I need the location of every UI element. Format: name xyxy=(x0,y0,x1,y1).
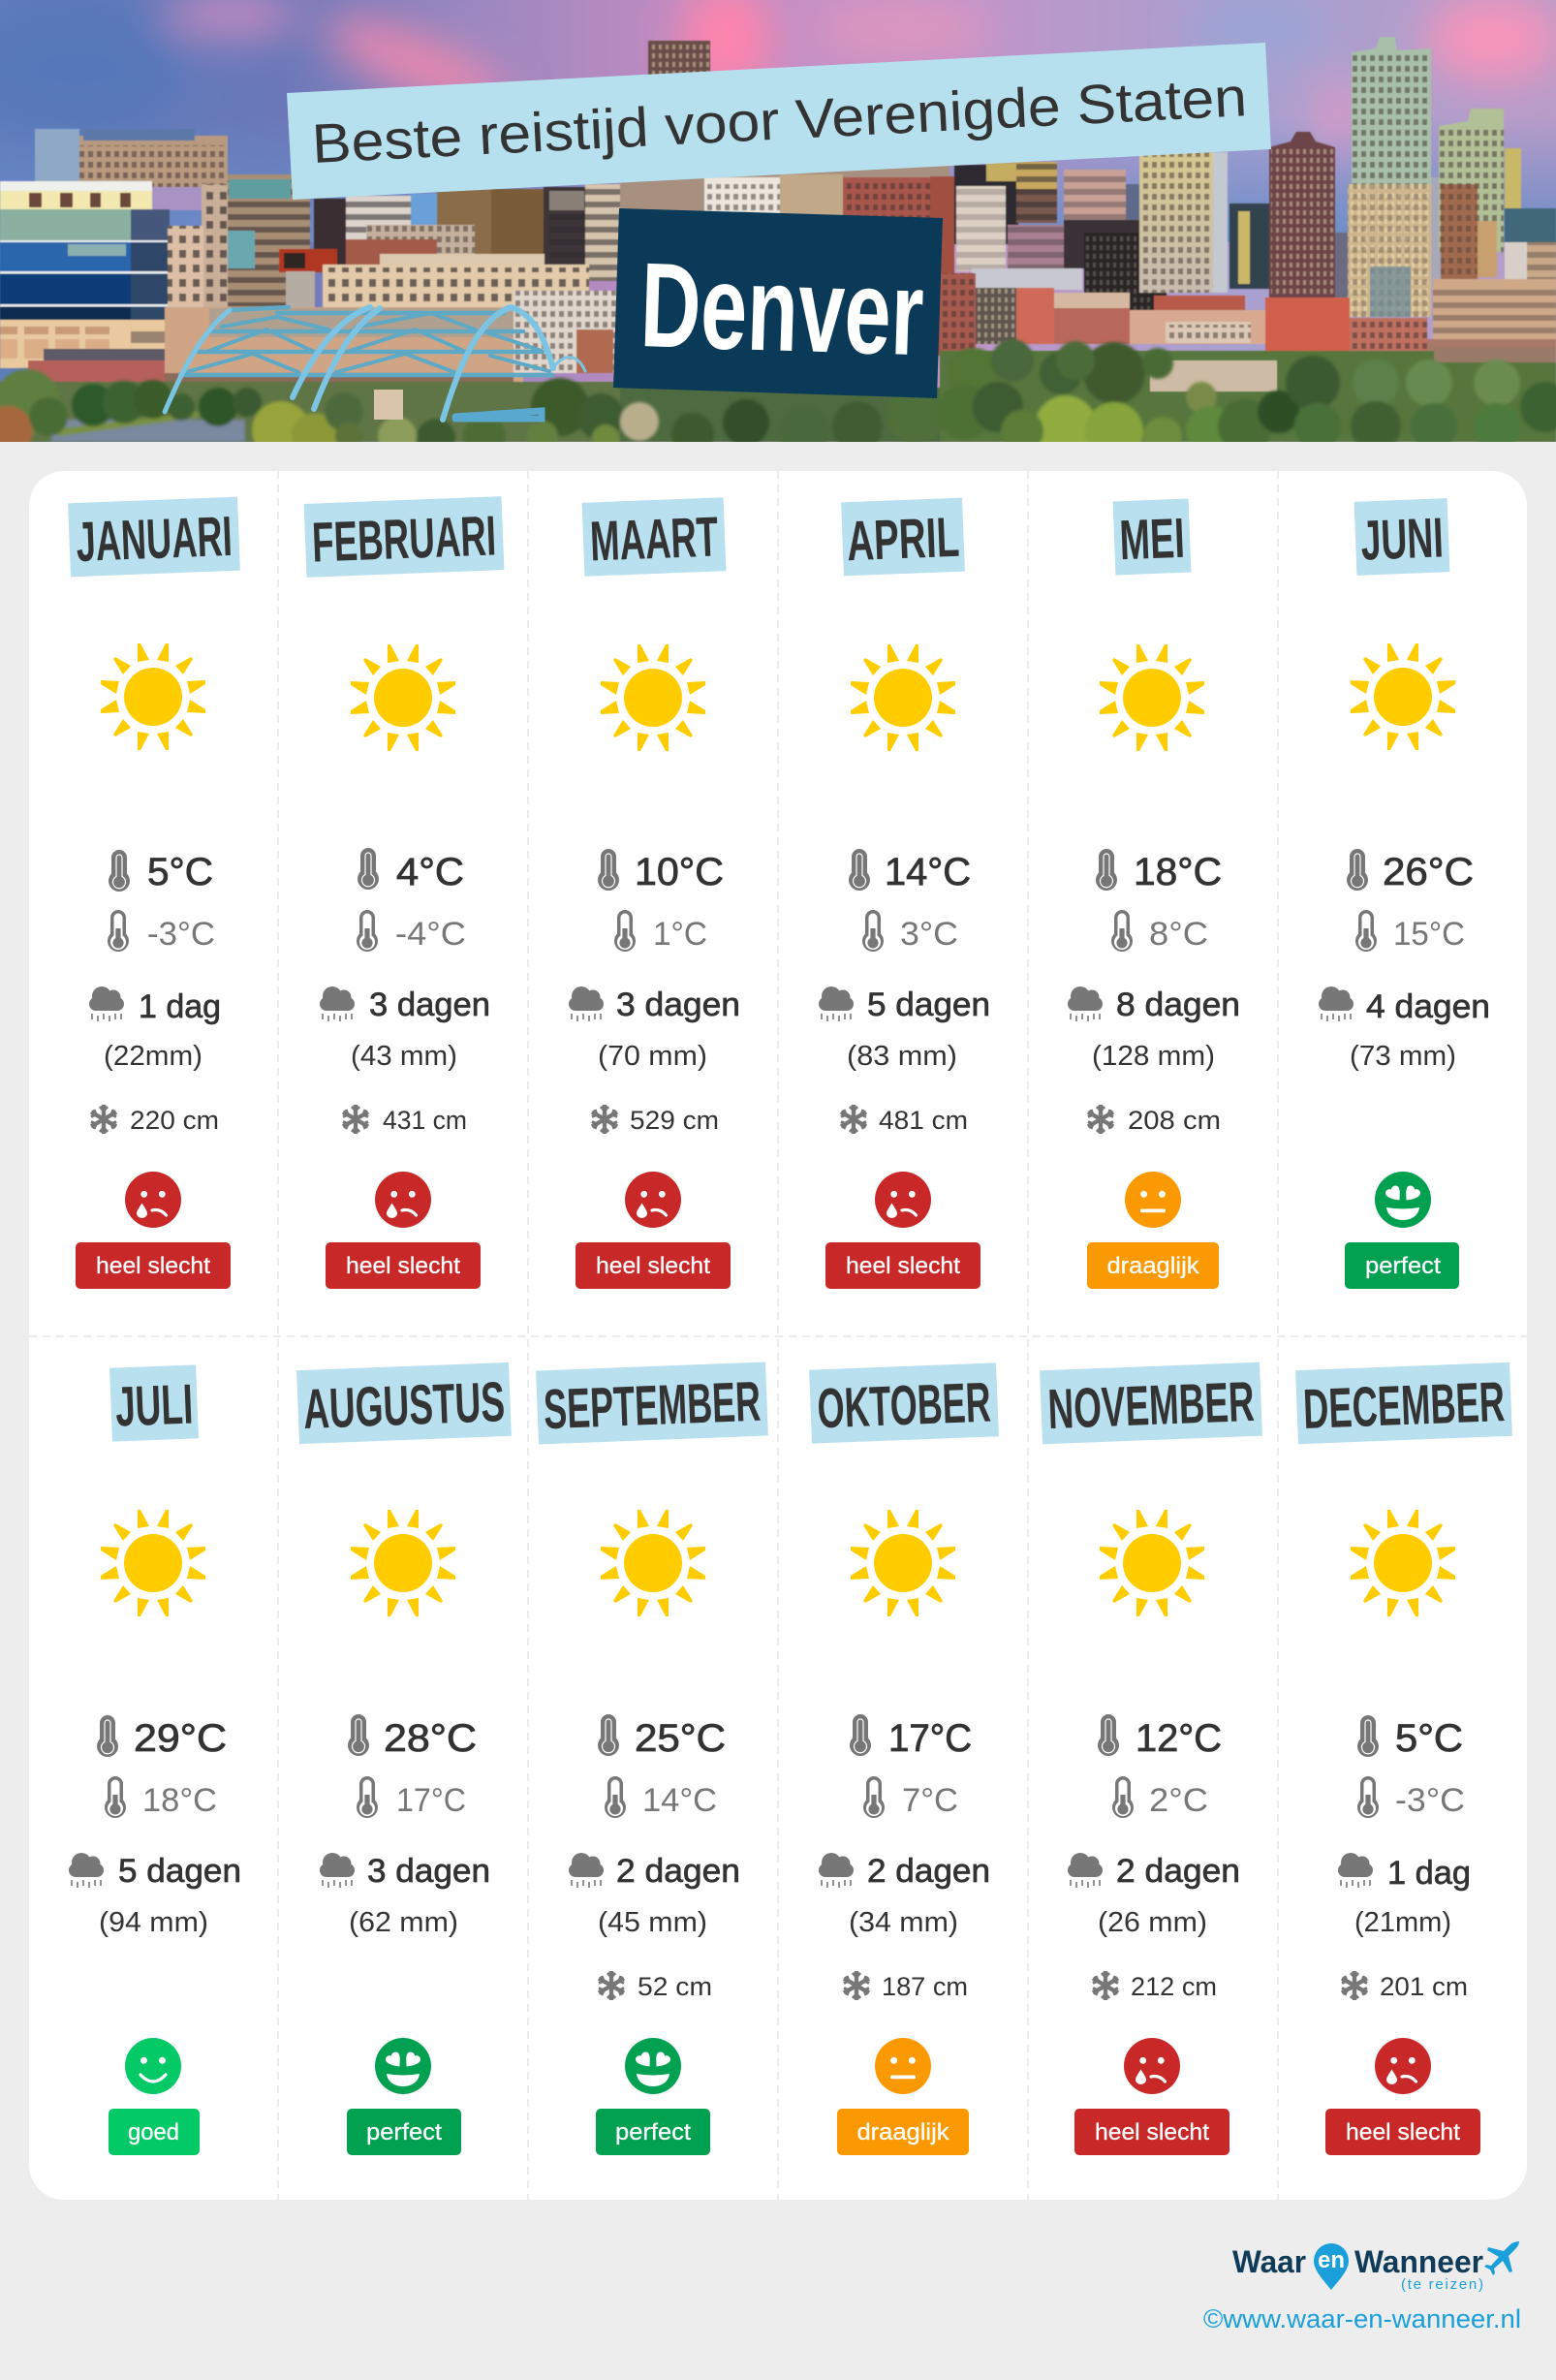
column: juli xyxy=(69,1364,241,2155)
city name box xyxy=(613,208,943,398)
logo text: Waar: Waar xyxy=(1232,2244,1306,2279)
panel: months table xyxy=(29,471,1527,2200)
rain days xyxy=(320,1853,490,1890)
month label: SEPTEMBER xyxy=(543,1370,762,1441)
snowfall xyxy=(592,1105,719,1135)
high temperature xyxy=(1098,1714,1222,1760)
rain days: 2 dagen xyxy=(1116,1853,1240,1890)
rating badge: perfect xyxy=(615,2119,691,2145)
month label xyxy=(1113,499,1191,575)
rating badge: heel slecht xyxy=(96,1253,210,1279)
high temperature xyxy=(849,849,971,893)
icon: sun xyxy=(101,643,205,750)
low temperature: -3°C xyxy=(1395,1782,1465,1819)
snowfall: 481 cm xyxy=(879,1106,968,1135)
rating badge xyxy=(825,1242,980,1289)
high temperature: 17°C xyxy=(888,1717,972,1760)
logo text: en: en xyxy=(1318,2247,1345,2273)
rain days xyxy=(569,986,740,1023)
low temperature xyxy=(108,910,215,953)
month label: JUNI xyxy=(1359,506,1445,573)
low temperature: 7°C xyxy=(902,1782,958,1819)
rating badge: heel slecht xyxy=(1095,2119,1209,2145)
backdrop behind bridge xyxy=(164,306,523,383)
high temperature: 5°C xyxy=(1395,1717,1463,1760)
rating badge xyxy=(1074,2109,1229,2155)
rating badge: perfect xyxy=(1365,1253,1441,1279)
tower above title banner xyxy=(647,40,711,75)
rating badge xyxy=(1345,1242,1459,1289)
rain days xyxy=(569,1853,740,1890)
icon: neutral face xyxy=(1125,1172,1181,1228)
rain days: 2 dagen xyxy=(616,1853,740,1890)
icon: sun xyxy=(351,644,455,751)
park base xyxy=(620,388,940,442)
snowfall xyxy=(844,1971,968,2001)
rainfall: (26 mm) xyxy=(1098,1907,1207,1938)
month label xyxy=(68,497,240,577)
low temperature: 3°C xyxy=(900,916,958,953)
low temperature xyxy=(614,910,707,953)
rain days: 1 dag xyxy=(1387,1855,1471,1892)
rating badge xyxy=(326,1242,481,1289)
column: mei xyxy=(1068,499,1240,1289)
low temperature xyxy=(862,910,958,953)
rating badge: perfect xyxy=(366,2119,442,2145)
month label xyxy=(109,1364,199,1442)
snowfall xyxy=(599,1971,712,2001)
icon: sad face xyxy=(125,1172,181,1228)
column: februari xyxy=(304,496,504,1289)
icon: sun xyxy=(601,1510,705,1616)
rating badge: heel slecht xyxy=(596,1253,710,1279)
rain days xyxy=(1338,1853,1471,1892)
snowfall: 187 cm xyxy=(882,1972,968,2001)
high temperature xyxy=(598,1714,726,1760)
rating badge xyxy=(109,2109,200,2155)
rain days: 2 dagen xyxy=(867,1853,990,1890)
icon: sad face xyxy=(625,1172,681,1228)
icon: heart-eyes face xyxy=(375,2038,431,2094)
month label: JULI xyxy=(114,1372,194,1439)
high temperature: 5°C xyxy=(147,851,213,893)
rain days: 4 dagen xyxy=(1366,988,1490,1025)
rain days: 8 dagen xyxy=(1116,986,1240,1023)
title banner xyxy=(287,43,1271,200)
month label xyxy=(1040,1362,1262,1444)
snowfall: 52 cm xyxy=(638,1972,712,2001)
column: juni xyxy=(1319,498,1490,1289)
column: maart xyxy=(569,497,740,1289)
trees xyxy=(0,337,1556,442)
month label: NOVEMBER xyxy=(1046,1370,1256,1441)
snowfall: 529 cm xyxy=(630,1106,719,1135)
icon: heart-eyes face xyxy=(625,2038,681,2094)
low temperature xyxy=(1355,910,1465,953)
right of Denver box xyxy=(930,176,954,356)
high temperature xyxy=(358,848,464,893)
column: december xyxy=(1295,1362,1512,2155)
header photo: Denver skyline xyxy=(0,0,1556,460)
rating badge xyxy=(576,1242,731,1289)
monument xyxy=(374,390,403,420)
low temperature: 17°C xyxy=(396,1782,466,1819)
low temperature: 1°C xyxy=(653,916,707,953)
rainfall: (73 mm) xyxy=(1350,1041,1456,1072)
icon: sun xyxy=(601,644,705,751)
icon: sun xyxy=(1351,643,1455,750)
low temperature xyxy=(357,910,466,953)
column: april xyxy=(819,498,990,1289)
month label: JANUARI xyxy=(75,505,233,574)
month label: MEI xyxy=(1118,507,1186,572)
rainfall: (22mm) xyxy=(104,1041,202,1072)
centre buildings under title xyxy=(620,155,949,223)
high temperature: 29°C xyxy=(134,1717,227,1760)
high temperature: 4°C xyxy=(396,851,464,893)
rainfall: (34 mm) xyxy=(849,1907,958,1938)
rating badge: heel slecht xyxy=(346,1253,460,1279)
icon: neutral face xyxy=(875,2038,931,2094)
low temperature xyxy=(1111,910,1208,953)
high temperature: 26°C xyxy=(1383,851,1474,893)
high temperature xyxy=(598,849,724,893)
icon: sad face xyxy=(1124,2038,1180,2094)
icon: sun xyxy=(351,1510,455,1616)
rating badge: goed xyxy=(128,2119,179,2145)
column: oktober xyxy=(809,1362,999,2155)
snowfall: 431 cm xyxy=(383,1106,467,1135)
low temperature: 18°C xyxy=(142,1782,217,1819)
city name: Denver xyxy=(638,238,925,381)
rating badge: draaglijk xyxy=(856,2119,950,2145)
low temperature xyxy=(863,1776,958,1819)
rating badge: heel slecht xyxy=(846,1253,960,1279)
striped tower xyxy=(228,174,310,310)
snowfall: 208 cm xyxy=(1128,1106,1221,1135)
rain days: 3 dagen xyxy=(369,986,490,1023)
snowfall xyxy=(841,1105,968,1135)
snowfall xyxy=(1342,1971,1468,2001)
snowfall xyxy=(1093,1971,1217,2001)
low temperature xyxy=(357,1776,466,1819)
high temperature: 25°C xyxy=(635,1717,726,1760)
snowfall: 220 cm xyxy=(130,1106,219,1135)
high temperature xyxy=(850,1714,972,1760)
month label xyxy=(296,1362,512,1444)
icon: sun xyxy=(851,1510,955,1616)
low temperature: 15°C xyxy=(1393,916,1465,953)
rating badge xyxy=(1325,2109,1480,2155)
rating badge: heel slecht xyxy=(1346,2119,1460,2145)
low temperature xyxy=(605,1776,717,1819)
month label xyxy=(841,498,965,576)
rainfall: (21mm) xyxy=(1354,1907,1451,1938)
rainfall: (43 mm) xyxy=(351,1041,457,1072)
source url: ©www.waar-en-wanneer.nl xyxy=(1203,2304,1521,2333)
column: januari xyxy=(68,497,240,1289)
rain days xyxy=(1319,986,1490,1025)
month label: OKTOBER xyxy=(816,1371,992,1440)
high temperature xyxy=(97,1715,227,1760)
column: september xyxy=(536,1362,768,2155)
low temperature: 2°C xyxy=(1149,1782,1208,1819)
rain days xyxy=(1068,1853,1240,1890)
month label xyxy=(1354,498,1449,576)
high temperature xyxy=(1347,849,1474,893)
high temperature xyxy=(1357,1715,1463,1760)
rating badge xyxy=(596,2109,710,2155)
rain days xyxy=(69,1853,241,1890)
month label: AUGUSTUS xyxy=(302,1370,506,1441)
column: november xyxy=(1040,1362,1262,2155)
snowfall xyxy=(91,1105,219,1135)
rainfall: (83 mm) xyxy=(847,1041,957,1072)
low temperature xyxy=(105,1776,217,1819)
icon: smiling face xyxy=(125,2038,181,2094)
rainfall: (94 mm) xyxy=(99,1907,208,1938)
rain days xyxy=(89,986,221,1025)
rain days: 5 dagen xyxy=(118,1853,241,1890)
snowfall xyxy=(1088,1105,1221,1135)
high temperature: 12°C xyxy=(1136,1717,1222,1760)
rainfall: (70 mm) xyxy=(598,1041,707,1072)
rain days xyxy=(320,986,490,1023)
title text: Beste reistijd voor Verenigde Staten xyxy=(310,66,1248,175)
lower peach buildings xyxy=(0,319,166,369)
month label xyxy=(304,496,504,578)
logo tagline: (te reizen) xyxy=(1401,2276,1483,2293)
rainfall: (62 mm) xyxy=(349,1907,458,1938)
icon: airplane xyxy=(1484,2241,1519,2275)
rating badge: draaglijk xyxy=(1106,1253,1200,1279)
icon: map pin xyxy=(1314,2243,1349,2290)
high temperature: 18°C xyxy=(1134,851,1222,893)
icon: sad face xyxy=(875,1172,931,1228)
rain days: 3 dagen xyxy=(367,1853,490,1890)
high temperature: 28°C xyxy=(384,1717,477,1760)
rating badge xyxy=(347,2109,461,2155)
snowfall: 201 cm xyxy=(1380,1972,1468,2001)
column: augustus xyxy=(296,1362,512,2155)
high temperature: 10°C xyxy=(635,851,724,893)
low temperature xyxy=(1357,1776,1465,1819)
month label xyxy=(809,1362,999,1444)
rain days: 1 dag xyxy=(139,988,221,1025)
far left buildings xyxy=(35,129,79,187)
icon: sun xyxy=(1351,1510,1455,1616)
icon: sad face xyxy=(375,1172,431,1228)
high temperature: 14°C xyxy=(885,851,971,893)
icon: sun xyxy=(1100,644,1204,751)
month label: APRIL xyxy=(846,506,960,573)
rainfall: (45 mm) xyxy=(598,1907,707,1938)
high temperature xyxy=(348,1714,477,1760)
month label: FEBRUARI xyxy=(311,504,497,575)
high temperature xyxy=(109,850,213,893)
high temperature xyxy=(1096,849,1222,893)
icon: sun xyxy=(851,644,955,751)
icon: heart-eyes face xyxy=(1375,1172,1431,1228)
low temperature: 14°C xyxy=(642,1782,717,1819)
logo text: Wanneer: Wanneer xyxy=(1354,2244,1483,2279)
rain days: 5 dagen xyxy=(867,986,990,1023)
logo: Waar en Wanneer xyxy=(1232,2241,1519,2293)
month label xyxy=(536,1362,768,1445)
low temperature: -3°C xyxy=(147,916,215,953)
icon: sun xyxy=(1100,1510,1204,1616)
rainfall: (128 mm) xyxy=(1092,1041,1215,1072)
rating badge xyxy=(76,1242,231,1289)
snowfall xyxy=(343,1105,467,1135)
month label xyxy=(582,497,726,577)
rating badge xyxy=(837,2109,969,2155)
rain days xyxy=(819,1853,990,1890)
low temperature: 8°C xyxy=(1149,916,1208,953)
icon: sun xyxy=(101,1510,205,1616)
rain days xyxy=(1068,986,1240,1023)
rain days xyxy=(819,986,990,1023)
low temperature xyxy=(1112,1776,1208,1819)
rain days: 3 dagen xyxy=(616,986,740,1023)
month label: MAART xyxy=(589,505,719,574)
snowfall: 212 cm xyxy=(1131,1972,1217,2001)
low temperature: -4°C xyxy=(395,916,466,953)
rating badge xyxy=(1087,1242,1219,1289)
bridge xyxy=(165,307,585,420)
icon: sad face xyxy=(1375,2038,1431,2094)
